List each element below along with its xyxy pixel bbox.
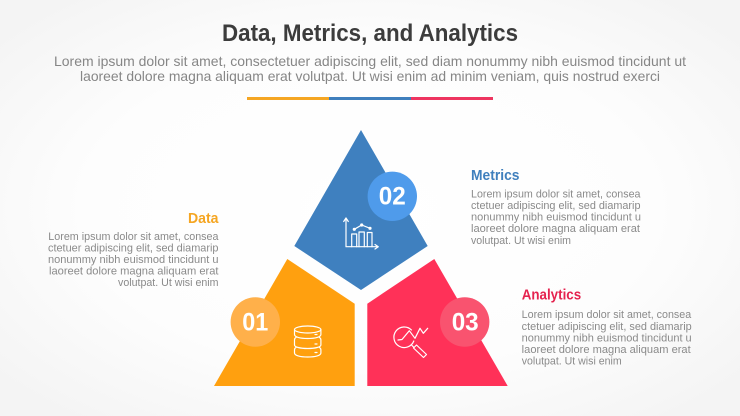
panel: analytics segment (367, 259, 508, 386)
description: analytics: nonummy nibh euismod tincidunt u (522, 332, 692, 344)
panel: metrics segment (294, 130, 428, 290)
description: data: ctetuer adipiscing elit, sed diamarip (48, 242, 219, 254)
description: analytics: laoreet dolore magna aliquam erat (522, 344, 691, 356)
description: data: Lorem ipsum dolor sit amet, consea (48, 231, 219, 243)
description: metrics: nonummy nibh euismod tincidunt u (471, 212, 641, 224)
heading: analytics: Analytics (522, 286, 581, 304)
blue segment shape (294, 130, 428, 290)
number badge 02: 02 (379, 182, 406, 210)
description: metrics: volutpat. Ut wisi enim (471, 235, 571, 247)
description: metrics: laoreet dolore magna aliquam erat (471, 223, 640, 235)
description: analytics: volutpat. Ut wisi enim (522, 355, 622, 367)
heading: metrics: Metrics (471, 167, 520, 184)
description: metrics: ctetuer adipiscing elit, sed diamarip (471, 200, 641, 212)
subtitle text (54, 53, 686, 84)
description: data (48, 231, 219, 289)
description: data: volutpat. Ut wisi enim (118, 277, 219, 289)
text block: data (48, 210, 219, 289)
red segment shape (367, 259, 508, 386)
orange segment shape (214, 259, 355, 386)
icon: magnifier with trend (394, 327, 428, 358)
panel: data segment (214, 259, 355, 386)
icon: database (294, 326, 321, 357)
number badge 03 (440, 297, 489, 347)
description: data: laoreet dolore magna aliquam erat (49, 266, 219, 278)
text block: metrics (471, 167, 641, 247)
number badge 02 (368, 172, 417, 221)
description: analytics: Lorem ipsum dolor sit amet, consea (522, 309, 691, 321)
number badge 03: 03 (452, 308, 479, 336)
description: analytics (522, 309, 692, 367)
description: metrics: Lorem ipsum dolor sit amet, consea (471, 188, 641, 200)
description: data: nonummy nibh euismod tincidunt u (48, 254, 219, 266)
icon: bar chart (344, 218, 378, 249)
description: metrics (471, 188, 641, 247)
text block: analytics (522, 286, 692, 367)
title: Data, Metrics, and Analytics (222, 20, 518, 47)
tricolor divider (247, 97, 493, 100)
subtitle text: laoreet dolore magna aliquam erat volutpat. Ut wisi enim ad minim veniam, quis nostrud exerci (80, 68, 660, 84)
heading: data: Data (188, 210, 219, 227)
description: analytics: ctetuer adipiscing elit, sed diamarip (522, 321, 692, 333)
number badge 01: 01 (242, 308, 268, 336)
number badge 01 (231, 297, 280, 347)
subtitle text: Lorem ipsum dolor sit amet, consectetuer adipiscing elit, sed diam nonummy nibh euismod tincidunt ut (54, 53, 686, 69)
